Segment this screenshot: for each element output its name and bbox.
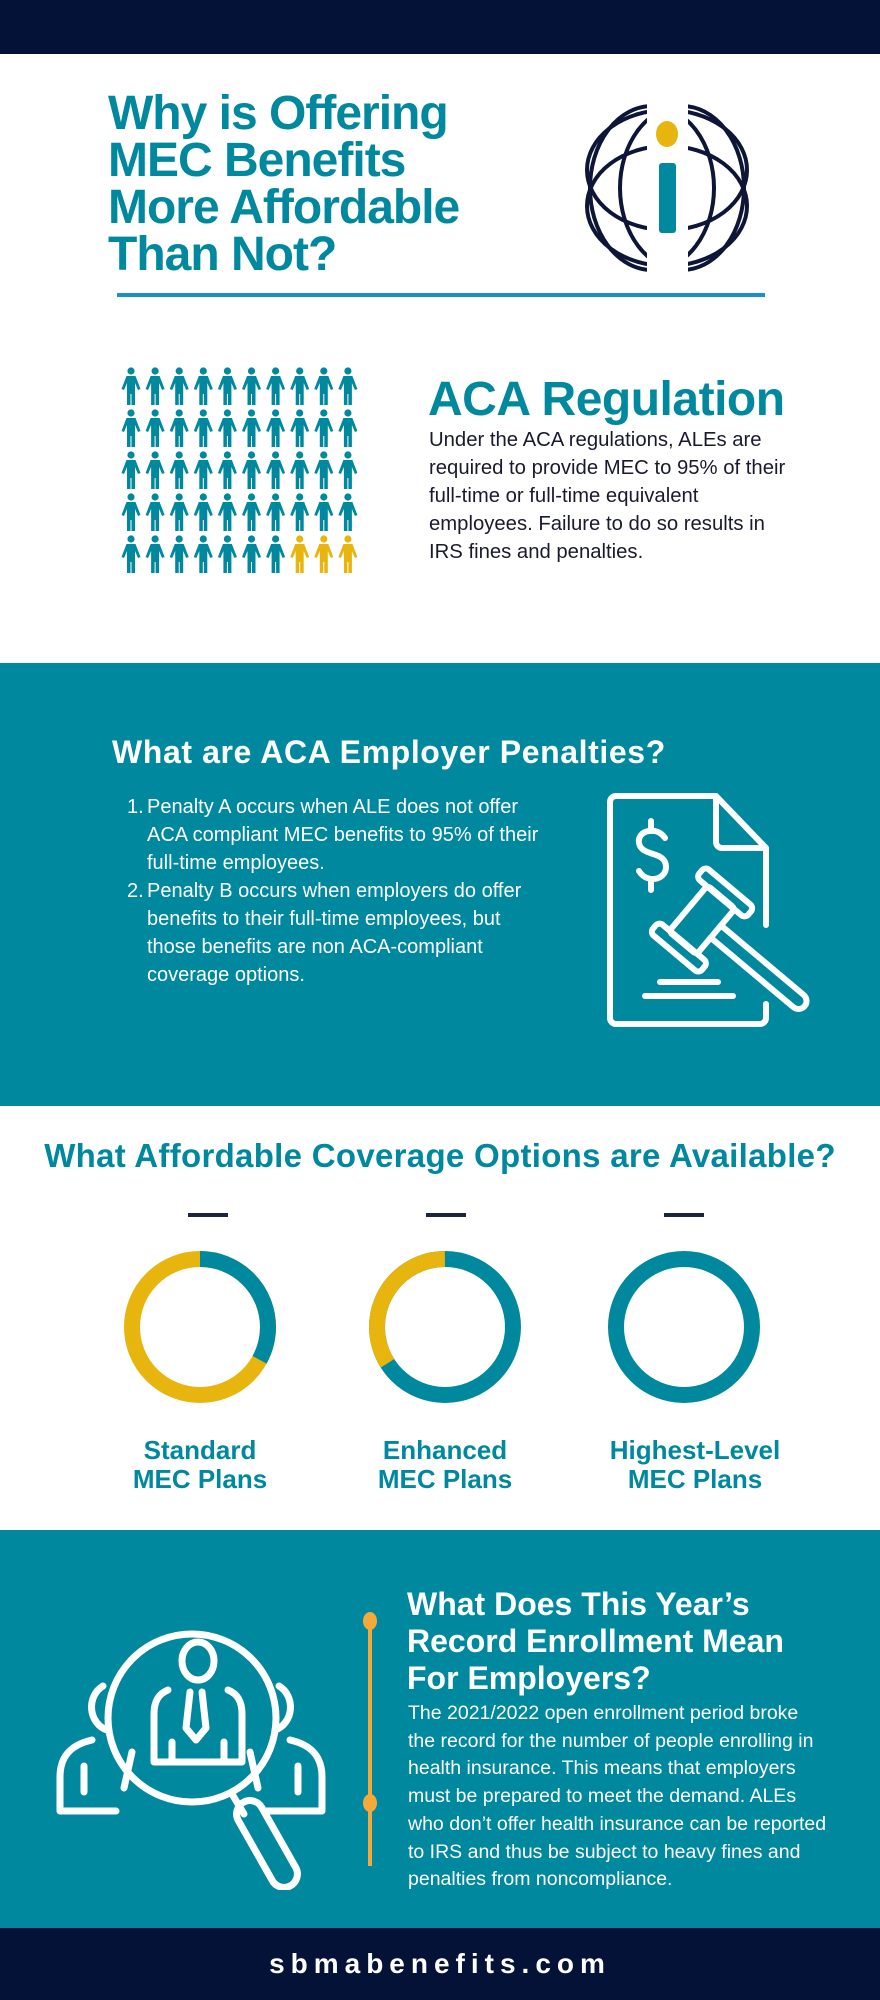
record enrollment text — [408, 1702, 826, 1890]
coverage heading: What Affordable Coverage Options are Available? — [44, 1137, 836, 1174]
penalties heading: What are ACA Employer Penalties? — [112, 734, 666, 770]
penalties list: Penalty B occurs when employers do offer — [147, 880, 521, 902]
footer url: sbmabenefits.com — [269, 1948, 611, 1979]
penalties list: those benefits are non ACA-compliant — [147, 936, 483, 958]
record enrollment text: must be prepared to meet the demand. ALEs — [408, 1785, 796, 1807]
title: More Affordable — [108, 181, 459, 234]
label: standard: MEC Plans — [133, 1464, 267, 1494]
title: Than Not? — [108, 228, 336, 281]
ACA Regulation heading: ACA Regulation — [428, 373, 785, 426]
panel: penalties — [0, 663, 880, 1106]
penalties list: coverage options. — [147, 964, 305, 986]
penalties list: full-time employees. — [147, 852, 325, 874]
label: enhanced: MEC Plans — [378, 1464, 512, 1494]
label: enhanced — [378, 1435, 512, 1494]
label: highest — [610, 1435, 780, 1494]
record enrollment text: The 2021/2022 open enrollment period broke — [408, 1702, 798, 1724]
timeline dots — [363, 1612, 377, 1630]
record enrollment text: who don’t offer health insurance can be reported — [408, 1813, 826, 1835]
title: Why is Offering — [108, 87, 448, 140]
record enrollment heading: For Employers? — [407, 1660, 651, 1696]
ACA Regulation text: required to provide MEC to 95% of their — [429, 457, 785, 479]
logo — [585, 104, 749, 272]
icon: document with gavel — [607, 793, 810, 1027]
divider — [117, 293, 765, 297]
ACA Regulation text: employees. Failure to do so results in — [429, 513, 765, 535]
penalties list: 1. — [127, 796, 144, 818]
panel: record enrollment — [0, 1530, 880, 1928]
footer — [0, 1928, 880, 2000]
label: standard: Standard — [144, 1435, 256, 1465]
people grid (95% icon chart) — [122, 367, 358, 573]
label: enhanced: Enhanced — [383, 1435, 507, 1465]
record enrollment text: health insurance. This means that employers — [408, 1757, 796, 1779]
record enrollment heading: Record Enrollment Mean — [407, 1623, 784, 1659]
dashes — [188, 1213, 228, 1217]
record enrollment text: penalties from noncompliance. — [408, 1868, 672, 1890]
donut: highest — [616, 1259, 752, 1395]
penalties list: 2. — [127, 880, 144, 902]
record enrollment text: to IRS and thus be subject to heavy fines and — [408, 1841, 800, 1863]
donut: standard — [132, 1259, 268, 1395]
penalties list — [127, 796, 538, 986]
penalties list: ACA compliant MEC benefits to 95% of their — [147, 824, 538, 846]
record enrollment heading: What Does This Year’s — [407, 1586, 750, 1622]
ACA Regulation text — [429, 429, 785, 563]
record enrollment text: the record for the number of people enrolling in — [408, 1730, 813, 1752]
icon: magnifier with people — [56, 1630, 326, 1890]
ACA Regulation text: Under the ACA regulations, ALEs are — [429, 429, 762, 451]
title — [108, 87, 459, 281]
title: MEC Benefits — [108, 134, 405, 187]
record enrollment heading — [407, 1586, 784, 1696]
ACA Regulation text: IRS fines and penalties. — [429, 541, 643, 563]
ACA Regulation text: full-time or full-time equivalent — [429, 485, 698, 507]
donut: enhanced — [377, 1259, 513, 1395]
timeline line — [368, 1622, 372, 1866]
penalties list: Penalty A occurs when ALE does not offer — [147, 796, 518, 818]
penalties list: benefits to their full-time employees, but — [147, 908, 501, 930]
label: highest: MEC Plans — [628, 1464, 762, 1494]
donut charts — [124, 1251, 760, 1403]
label: highest: Highest-Level — [610, 1435, 780, 1465]
top bar — [0, 0, 880, 54]
label: standard — [133, 1435, 267, 1494]
